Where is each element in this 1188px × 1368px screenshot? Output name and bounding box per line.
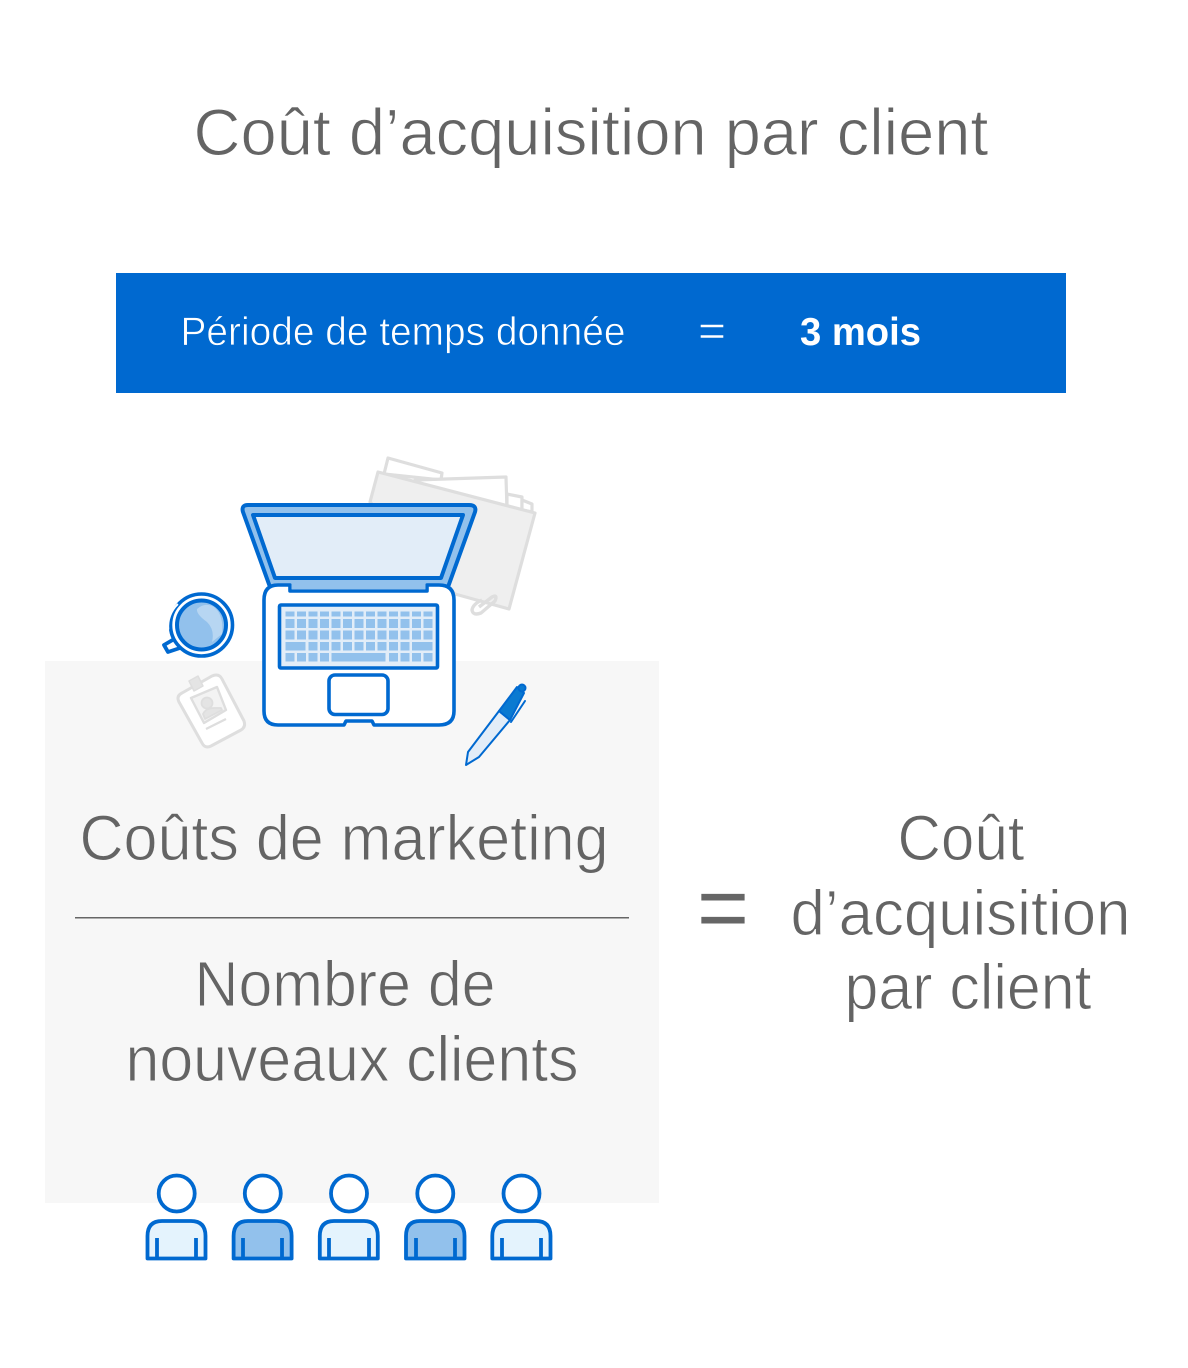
laptop lid (243, 505, 475, 587)
equals sign: = (697, 857, 749, 959)
result: Coût (898, 802, 1025, 874)
banner value: 3 mois (800, 311, 921, 354)
client 5 (492, 1176, 550, 1258)
client 1 (148, 1176, 206, 1258)
denominator: Nombre de (194, 948, 496, 1020)
result (790, 802, 1130, 1023)
denominator: nouveaux clients (126, 1023, 578, 1095)
client 4 (406, 1176, 464, 1258)
trackpad (329, 675, 388, 714)
icon: pen (466, 684, 526, 765)
keyboard (280, 605, 438, 668)
client 2 (234, 1176, 292, 1258)
icon: ID badge (178, 675, 245, 747)
result: par client (844, 951, 1092, 1023)
result: d’acquisition (790, 877, 1130, 949)
client 3 (320, 1176, 378, 1258)
panel: formula background (45, 661, 659, 1203)
banner: time period (116, 273, 1066, 393)
denominator (126, 948, 578, 1095)
fraction line (75, 917, 629, 918)
laptop hinge (292, 580, 426, 589)
title: Coût d’acquisition par client (194, 95, 988, 169)
banner label: Période de temps donnée (180, 310, 626, 354)
icon: laptop (243, 505, 475, 725)
icon: coffee cup (164, 594, 232, 656)
laptop screen (253, 515, 463, 578)
icons: five clients (148, 1176, 550, 1258)
banner equals sign: = (698, 307, 726, 354)
numerator: Coûts de marketing (80, 802, 608, 874)
icon: folder with papers (370, 458, 535, 614)
laptop base (264, 585, 454, 725)
